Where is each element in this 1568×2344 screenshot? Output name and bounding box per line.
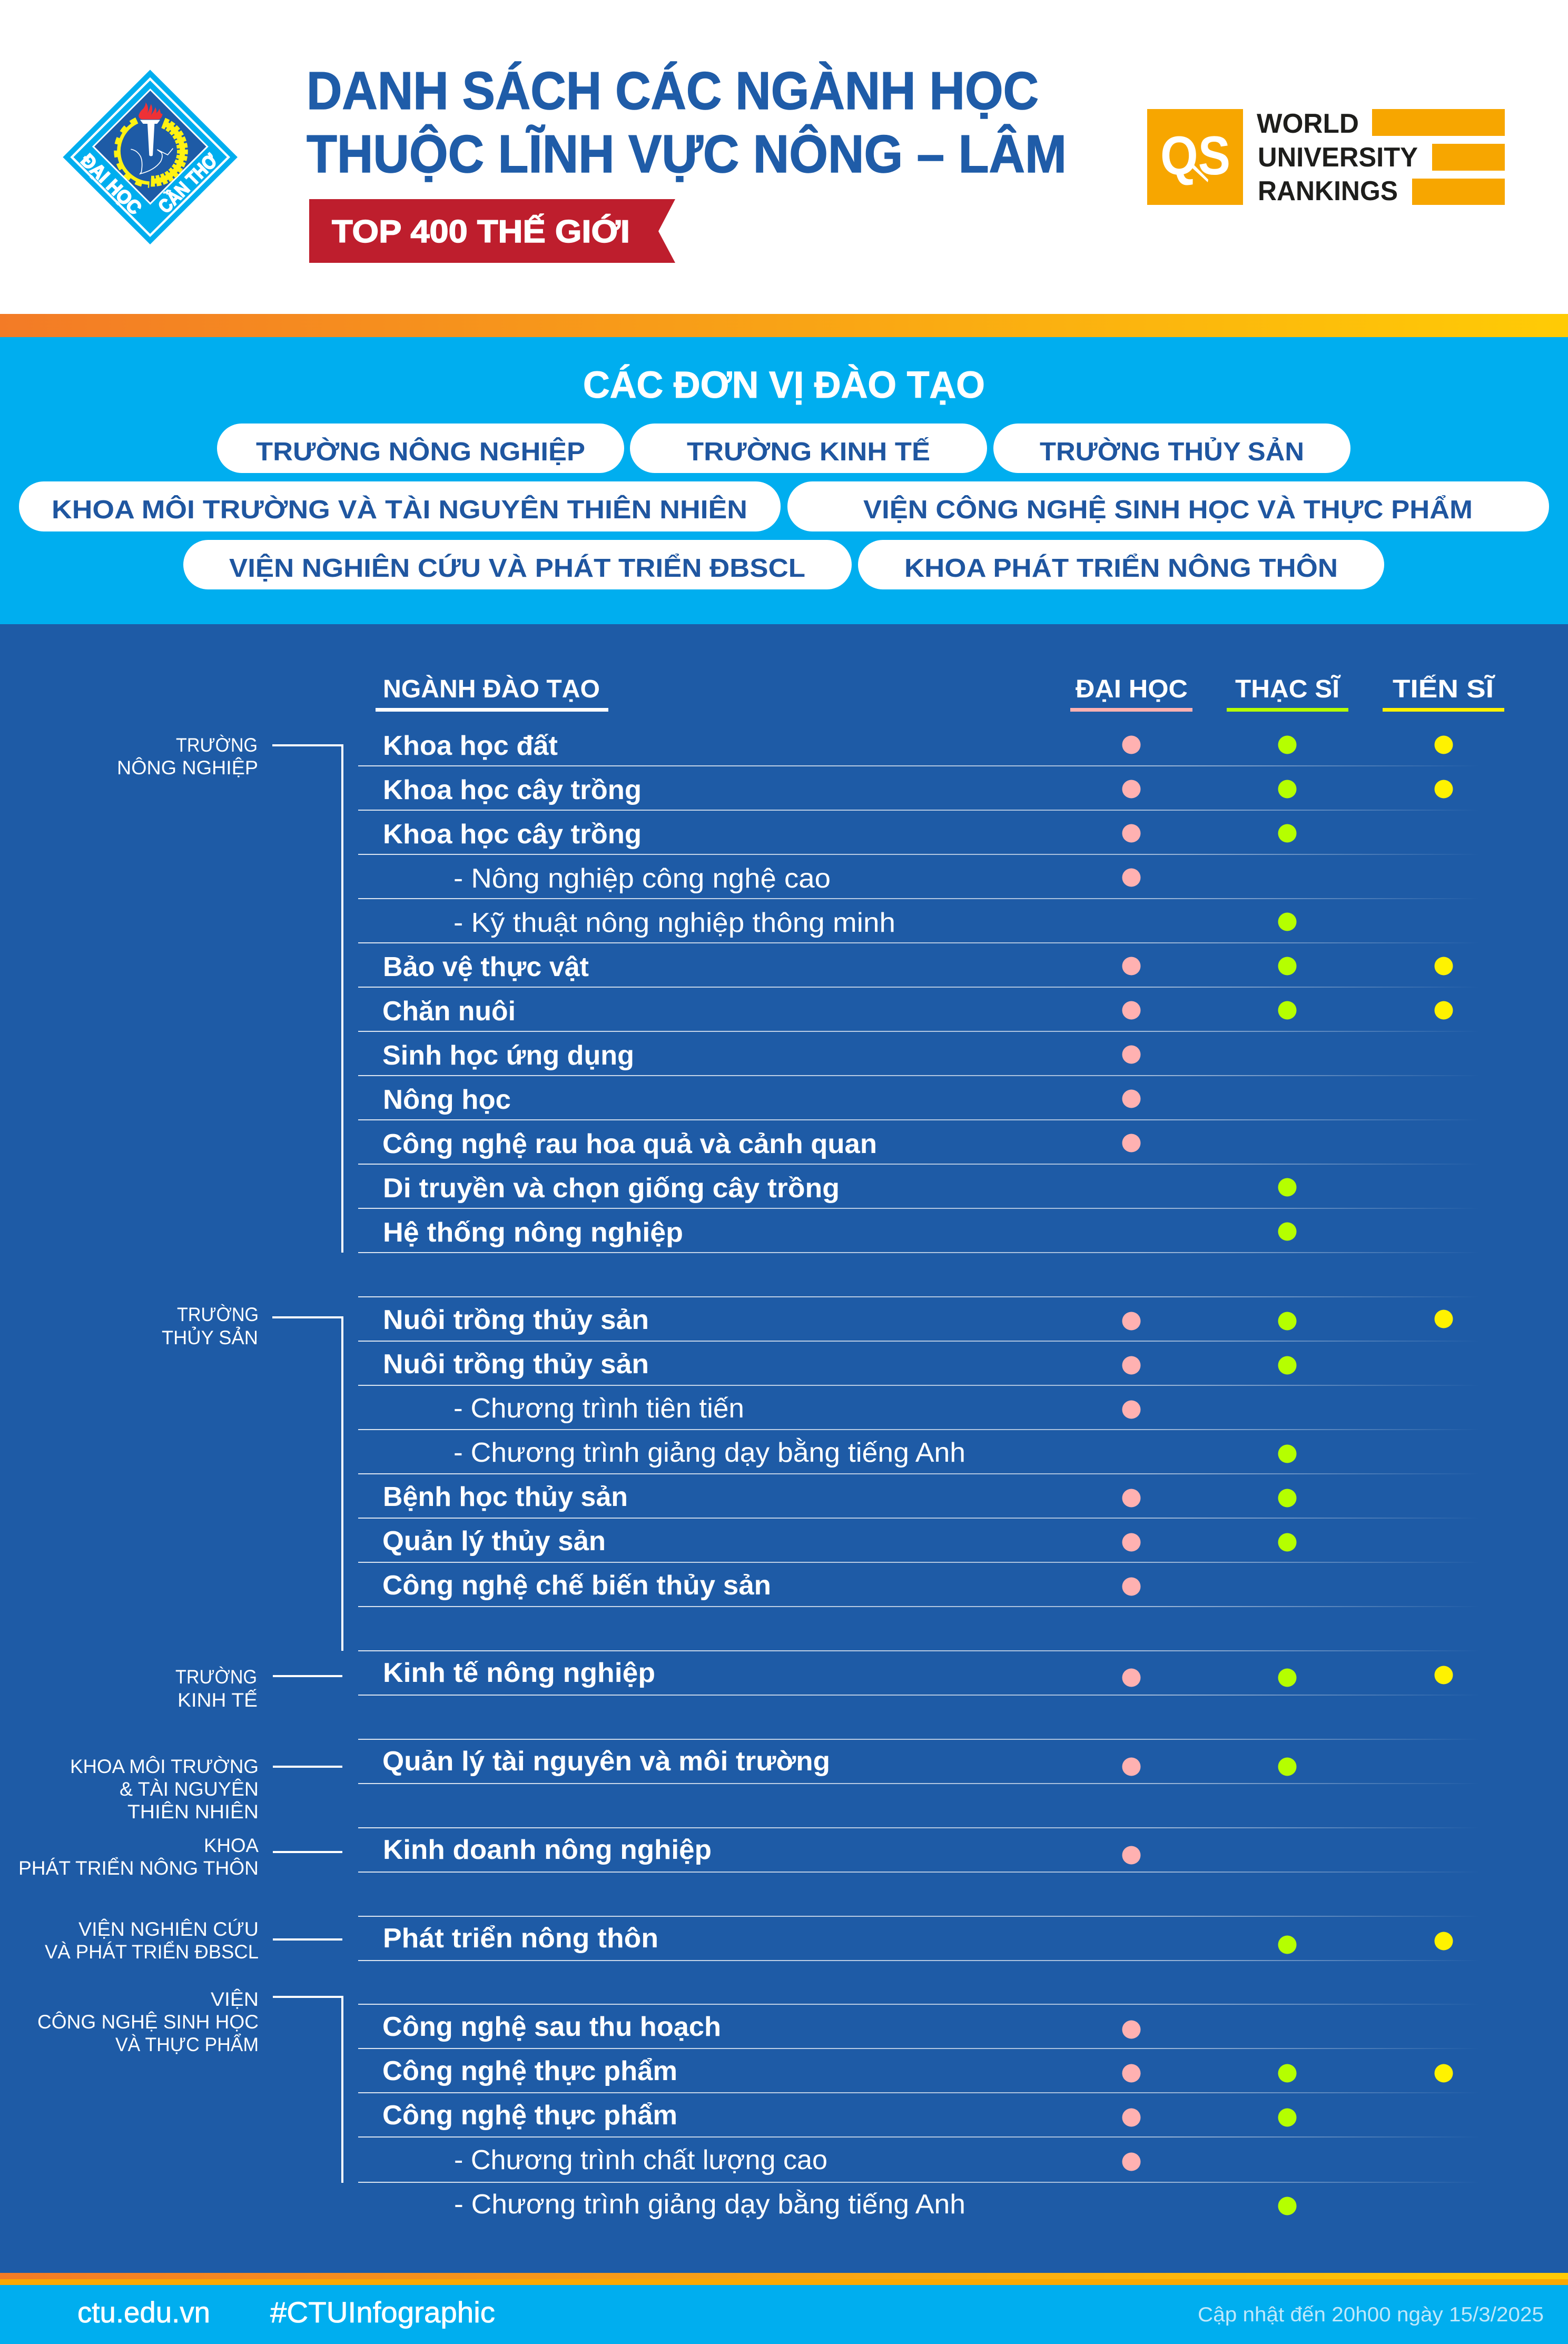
row bbox=[383, 1658, 1453, 1688]
connector bracket bbox=[272, 1317, 342, 1651]
group: Viện Công nghệ sinh học và Thực phẩm bbox=[37, 1988, 1453, 2220]
row: - Chương trình chất lượng cao bbox=[454, 2145, 827, 2175]
row: Công nghệ sau thu hoạch bbox=[382, 2012, 721, 2042]
row: - Chương trình giảng dạy bằng tiếng Anh bbox=[454, 2189, 965, 2220]
column header: Tiến sĩ bbox=[1383, 674, 1504, 712]
title bbox=[307, 62, 1067, 184]
row bbox=[383, 952, 1453, 982]
QS letters: QS bbox=[1160, 125, 1230, 186]
row: - Chương trình tiên tiến bbox=[453, 1393, 744, 1424]
row bbox=[383, 1085, 1141, 1115]
footer website: ctu.edu.vn bbox=[77, 2296, 210, 2329]
unit label: PHÁT TRIỂN NÔNG THÔN bbox=[18, 1857, 259, 1879]
column header: Đại học bbox=[1070, 675, 1192, 712]
group: Khoa Phát triển nông thôn bbox=[18, 1835, 1141, 1879]
row: Nuôi trồng thủy sản bbox=[383, 1305, 649, 1335]
unit label: VIỆN NGHIÊN CỨU bbox=[78, 1918, 259, 1940]
unit label bbox=[45, 1918, 259, 1963]
unit label: VÀ THỰC PHẨM bbox=[115, 2033, 259, 2055]
logo gear bbox=[116, 120, 150, 185]
units heading: CÁC ĐƠN VỊ ĐÀO TẠO bbox=[583, 365, 985, 406]
unit label: KINH TẾ bbox=[177, 1689, 258, 1711]
row bbox=[382, 1526, 1297, 1557]
pill: Viện Công nghệ sinh học bbox=[787, 481, 1549, 531]
row: Nuôi trồng thủy sản bbox=[383, 1349, 649, 1380]
pill: Khoa Môi trường bbox=[19, 481, 781, 531]
unit label bbox=[175, 1666, 258, 1711]
footer background bbox=[0, 2285, 1568, 2344]
unit label: TRƯỜNG bbox=[177, 1304, 259, 1325]
unit label: KHOA MÔI TRƯỜNG bbox=[70, 1756, 259, 1777]
QS word: University: UNIVERSITY bbox=[1258, 142, 1418, 173]
ribbon text: TOP 400 THẾ GIỚI bbox=[332, 214, 630, 249]
row bbox=[453, 863, 1141, 894]
row bbox=[453, 1437, 1297, 1468]
logo white ring bbox=[72, 79, 229, 235]
row bbox=[383, 1305, 1453, 1335]
logo: Đại học Cần Thơ bbox=[63, 70, 238, 244]
pill: Khoa Phát triển nông thôn: KHOA PHÁT TRIỂN NÔNG THÔN bbox=[904, 554, 1338, 583]
pill: Trường Nông nghiệp bbox=[217, 424, 624, 473]
column header: Ngành đào tạo: NGÀNH ĐÀO TẠO bbox=[383, 675, 600, 703]
row: Khoa học cây trồng bbox=[383, 775, 642, 805]
QS tail bbox=[1188, 163, 1208, 182]
column header: Thạc sĩ: THẠC SĨ bbox=[1235, 674, 1341, 703]
gradient band bbox=[0, 314, 1568, 337]
row bbox=[453, 1393, 1141, 1424]
unit label: CÔNG NGHỆ SINH HỌC bbox=[37, 2011, 259, 2033]
row: Kinh doanh nông nghiệp bbox=[383, 1835, 712, 1865]
row: Công nghệ rau hoa quả và cảnh quan bbox=[382, 1129, 877, 1159]
row: Chăn nuôi bbox=[382, 996, 516, 1027]
footer update note: Cập nhật đến 20h00 ngày 15/3/2025 bbox=[1198, 2303, 1544, 2326]
group: Khoa Môi trường & Tài nguyên thiên nhiên bbox=[70, 1746, 1297, 1823]
row bbox=[382, 996, 1453, 1027]
pill: Viện Nghiên cứu ĐBSCL: VIỆN NGHIÊN CỨU VÀ PHÁT TRIỂN ĐBSCL bbox=[229, 554, 805, 583]
logo text: Cần Thơ: CẦN THƠ bbox=[154, 150, 222, 218]
column header: Đại học: ĐẠI HỌC bbox=[1076, 675, 1188, 703]
unit label: NÔNG NGHIỆP bbox=[117, 757, 258, 779]
connector bbox=[273, 1938, 342, 1941]
row bbox=[383, 1173, 1297, 1204]
title line 2: THUỘC LĨNH VỰC NÔNG – LÂM bbox=[307, 124, 1067, 184]
footer hashtag: #CTUInfographic bbox=[270, 2296, 495, 2329]
QS World University Rankings logo bbox=[1147, 109, 1505, 206]
row: Công nghệ chế biến thủy sản bbox=[382, 1570, 771, 1601]
logo torch bbox=[140, 120, 160, 156]
row bbox=[383, 731, 1453, 761]
unit label: TRƯỜNG bbox=[176, 734, 258, 756]
unit label: THIÊN NHIÊN bbox=[127, 1801, 259, 1823]
panel: training units bbox=[0, 337, 1568, 624]
row bbox=[383, 1217, 1297, 1248]
pill: Trường Thủy sản bbox=[993, 424, 1350, 473]
row bbox=[453, 908, 1297, 938]
pill: Viện Nghiên cứu ĐBSCL bbox=[183, 540, 852, 589]
row: Khoa học cây trồng bbox=[383, 819, 642, 850]
title line 1: DANH SÁCH CÁC NGÀNH HỌC bbox=[307, 62, 1039, 121]
row: Khoa học đất bbox=[383, 731, 558, 761]
unit label bbox=[70, 1756, 259, 1823]
group: Trường Nông nghiệp bbox=[117, 731, 1453, 1253]
row: Hệ thống nông nghiệp bbox=[383, 1217, 683, 1248]
unit label bbox=[37, 1988, 259, 2055]
pill: Trường Kinh tế: TRƯỜNG KINH TẾ bbox=[687, 437, 930, 466]
header background bbox=[0, 0, 1568, 314]
row: Sinh học ứng dụng bbox=[382, 1040, 634, 1071]
QS bar 3 bbox=[1412, 179, 1505, 205]
pill: Trường Nông nghiệp: TRƯỜNG NÔNG NGHIỆP bbox=[256, 437, 585, 466]
row: - Kỹ thuật nông nghiệp thông minh bbox=[453, 908, 895, 938]
panel: majors table background bbox=[0, 624, 1568, 2273]
pill: Viện Công nghệ sinh học: VIỆN CÔNG NGHỆ SINH HỌC VÀ THỰC PHẨM bbox=[863, 495, 1473, 524]
group: Viện Nghiên cứu và Phát triển ĐBSCL bbox=[45, 1918, 1453, 1963]
row bbox=[383, 1923, 1453, 1954]
row: Nông học bbox=[383, 1085, 511, 1115]
unit label bbox=[162, 1304, 259, 1348]
QS bar 2 bbox=[1432, 144, 1505, 171]
row: Quản lý tài nguyên và môi trường bbox=[382, 1746, 830, 1777]
unit label: TRƯỜNG bbox=[175, 1666, 257, 1688]
row: Bệnh học thủy sản bbox=[383, 1482, 628, 1512]
logo flame bbox=[139, 102, 163, 120]
row: Công nghệ thực phẩm bbox=[382, 2100, 677, 2131]
row: Kinh tế nông nghiệp bbox=[383, 1658, 655, 1688]
ribbon: Top 400 thế giới bbox=[309, 199, 675, 263]
pill: Trường Thủy sản: TRƯỜNG THỦY SẢN bbox=[1040, 437, 1304, 466]
row bbox=[383, 819, 1297, 850]
unit label bbox=[117, 734, 258, 779]
QS word: World: WORLD bbox=[1257, 109, 1359, 139]
row: Công nghệ thực phẩm bbox=[382, 2056, 677, 2086]
row bbox=[454, 2145, 1141, 2175]
row bbox=[454, 2189, 1297, 2220]
row bbox=[382, 1746, 1297, 1777]
connector bbox=[273, 1675, 342, 1677]
unit label: & TÀI NGUYÊN bbox=[120, 1778, 259, 1800]
QS square bbox=[1147, 109, 1243, 205]
units background bbox=[0, 337, 1568, 624]
connector bbox=[273, 1766, 342, 1768]
row bbox=[382, 2056, 1453, 2086]
connector bbox=[273, 1851, 342, 1853]
column header: Thạc sĩ bbox=[1227, 674, 1348, 712]
table header bbox=[376, 674, 1504, 712]
row: Bảo vệ thực vật bbox=[383, 952, 589, 982]
logo outer diamond bbox=[63, 70, 238, 244]
row bbox=[382, 1570, 1141, 1601]
pill: Khoa Môi trường: KHOA MÔI TRƯỜNG VÀ TÀI NGUYÊN THIÊN NHIÊN bbox=[52, 495, 747, 524]
logo text: Đại học: ĐẠI HỌC bbox=[77, 150, 146, 219]
connector bracket bbox=[273, 1997, 342, 2183]
unit label: THỦY SẢN bbox=[162, 1326, 258, 1348]
row: Phát triển nông thôn bbox=[383, 1923, 658, 1954]
pill: Trường Kinh tế bbox=[630, 424, 987, 473]
row: Di truyền và chọn giống cây trồng bbox=[383, 1173, 840, 1204]
pill: Khoa Phát triển nông thôn bbox=[858, 540, 1384, 589]
row bbox=[382, 1040, 1141, 1071]
unit label: VÀ PHÁT TRIỂN ĐBSCL bbox=[45, 1941, 259, 1963]
row bbox=[382, 1129, 1141, 1159]
unit label: KHOA bbox=[204, 1835, 259, 1856]
unit label: VIỆN bbox=[211, 1988, 259, 2010]
logo inner diamond bbox=[93, 90, 208, 204]
row bbox=[383, 1349, 1297, 1380]
footer orange band bbox=[0, 2279, 1568, 2285]
row bbox=[383, 775, 1453, 805]
connector bracket bbox=[272, 745, 342, 1253]
column header: Tiến sĩ: TIẾN SĨ bbox=[1393, 674, 1495, 703]
row bbox=[382, 2100, 1297, 2131]
row: - Nông nghiệp công nghệ cao bbox=[453, 863, 831, 894]
unit label bbox=[18, 1835, 259, 1879]
footer gradient band bbox=[0, 2273, 1568, 2279]
group: Trường Thủy sản bbox=[162, 1304, 1453, 1651]
logo delta map bbox=[131, 149, 173, 174]
row bbox=[383, 1835, 1141, 1865]
QS word: Rankings: RANKINGS bbox=[1258, 176, 1398, 206]
ribbon shape bbox=[309, 199, 675, 263]
QS bar 1 bbox=[1372, 109, 1505, 136]
group: Trường Kinh tế bbox=[175, 1658, 1453, 1711]
footer bbox=[0, 2273, 1568, 2344]
row: Quản lý thủy sản bbox=[382, 1526, 606, 1557]
row bbox=[382, 2012, 1141, 2042]
logo wheat bbox=[151, 123, 182, 181]
row bbox=[383, 1482, 1297, 1512]
row: - Chương trình giảng dạy bằng tiếng Anh bbox=[453, 1437, 965, 1468]
